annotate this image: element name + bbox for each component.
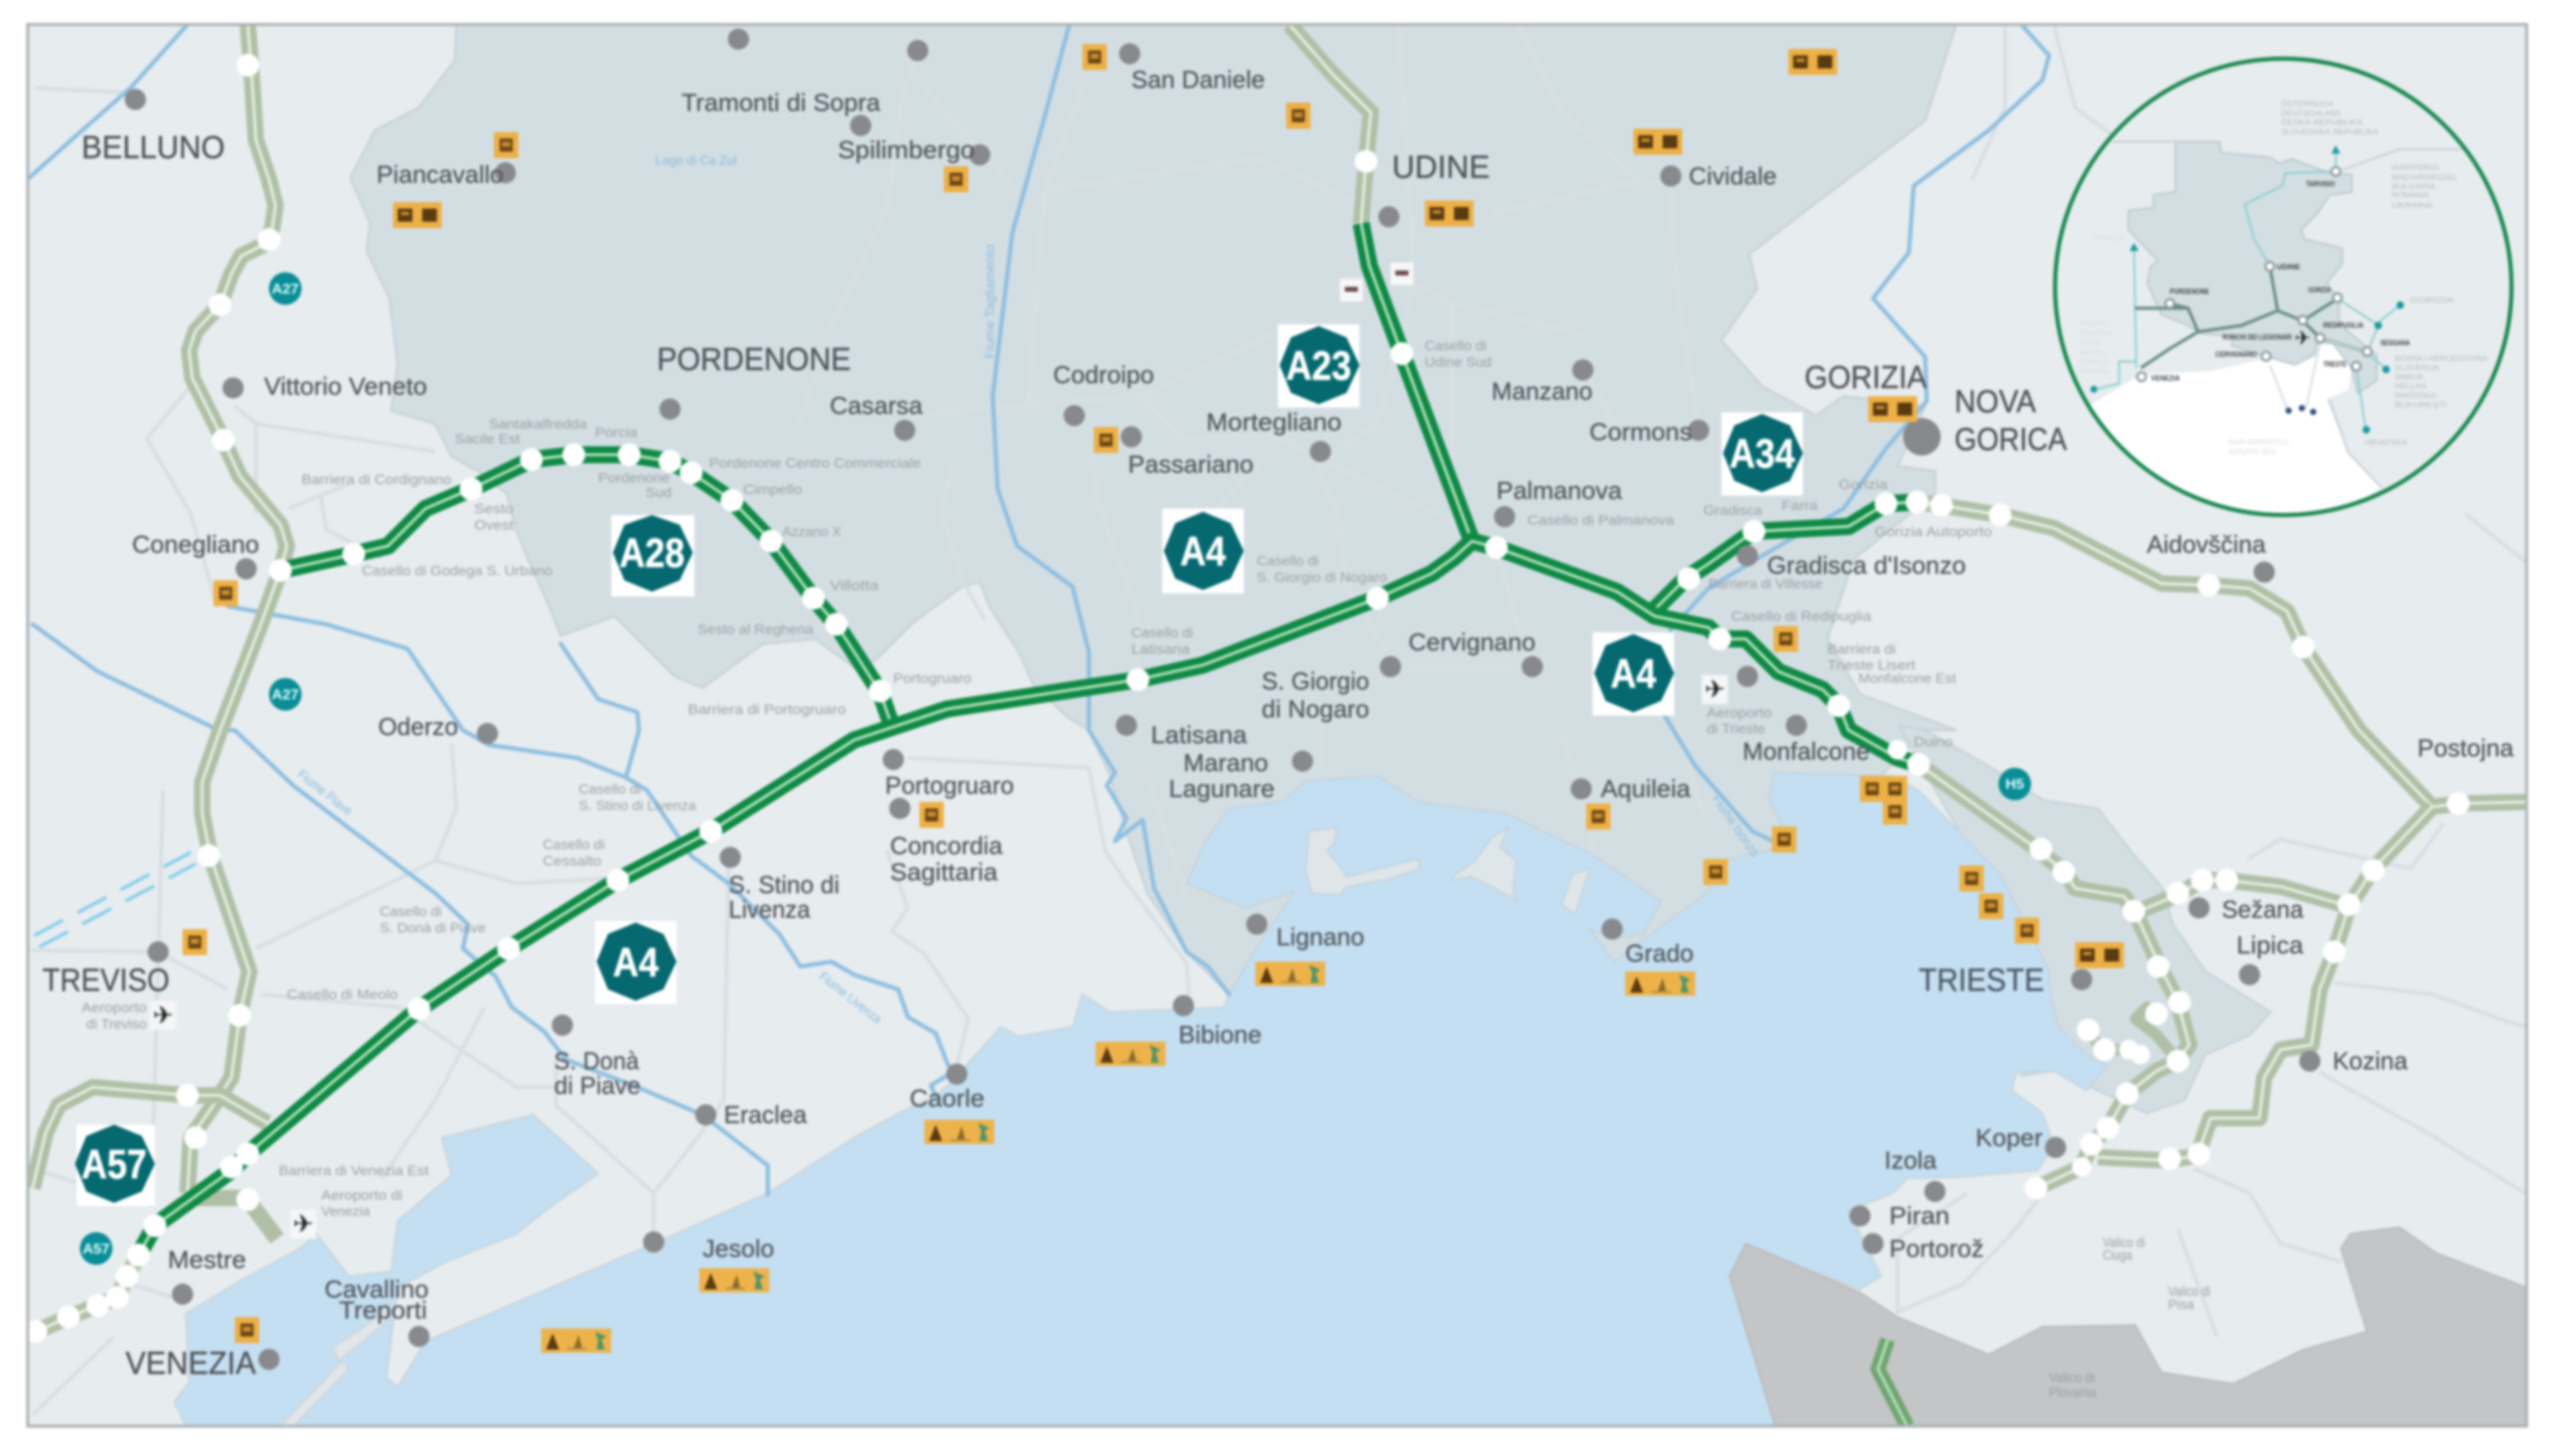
- river: tributary: [561, 644, 639, 778]
- small badges: A27 A57 H5: [80, 272, 2031, 1265]
- water labels: Fiume Piave: [295, 768, 355, 819]
- water labels: Lago di Ca Zul: [655, 154, 737, 168]
- city labels: Sagittaria: [890, 859, 998, 886]
- city labels: Lignano: [1276, 924, 1364, 951]
- city labels: VENEZIA: [126, 1346, 256, 1381]
- city labels: Mortegliano: [1207, 409, 1341, 436]
- toll gate and minor labels: Gorizia: [1839, 476, 1888, 492]
- city labels: Treporti: [339, 1298, 427, 1325]
- water labels: Fiume Tagliamento: [984, 245, 998, 359]
- city labels: PORDENONE: [657, 342, 851, 378]
- city labels: Cavallino: [324, 1276, 429, 1303]
- motorway shield: A34: [1722, 412, 1803, 495]
- river: Isonzo: [1654, 25, 2049, 851]
- city labels: BELLUNO: [81, 131, 225, 166]
- city labels: S. Giorgio: [1262, 668, 1369, 696]
- city labels: Piran: [1889, 1203, 1950, 1230]
- airport and service icons: [150, 263, 1728, 1238]
- city labels: Cividale: [1689, 163, 1777, 190]
- islands: Venice lido: [280, 1299, 391, 1426]
- motorway shield: A28: [611, 515, 694, 596]
- inset labels: MAR ADRIATICO: [2228, 439, 2288, 448]
- city labels: GORIZIA: [1804, 360, 1927, 395]
- city labels: Izola: [1884, 1147, 1937, 1174]
- city labels: Sežana: [2222, 896, 2304, 923]
- inset labels: BOLOGNA: [2080, 328, 2113, 338]
- inset labels: BOSNA I HERCEGOVINA: [2395, 355, 2488, 364]
- inset arrows: [2090, 145, 2404, 434]
- toll gate and minor labels: Pordenone Centro Commerciale: [709, 456, 921, 471]
- city labels: Kozina: [2333, 1048, 2408, 1075]
- inset labels: ČESKÁ REPUBLIKA: [2281, 118, 2364, 127]
- inset labels: SRBIJA: [2395, 373, 2424, 382]
- inset labels: NIEDERÖSTERREICH: [2392, 163, 2439, 172]
- inset labels: PORDENONE: [2170, 287, 2209, 296]
- Croatian motorway segment: [1878, 1339, 1907, 1426]
- toll gate and minor labels: Ovest: [475, 517, 514, 533]
- city labels: Oderzo: [378, 714, 458, 741]
- toll gate and minor labels: Valico di: [2168, 1284, 2210, 1299]
- motorway shield: A4 east: A4: [1611, 651, 1657, 697]
- toll gate and minor labels: Venezia: [321, 1204, 370, 1219]
- inset labels: HRVATSKA: [2365, 439, 2407, 448]
- city labels: Piancavallo: [376, 161, 503, 188]
- small badges: A27 A57 H5: A57: [83, 1240, 110, 1256]
- toll gate and minor labels: Duino: [1914, 734, 1953, 750]
- toll gate and minor labels: Casello di: [1131, 625, 1193, 641]
- toll gate and minor labels: Barriera di Cordignano: [301, 471, 452, 487]
- inset labels: VENEZIA: [2151, 374, 2180, 383]
- toll gate and minor labels: Monfalcone Est: [1859, 671, 1956, 687]
- toll gate and minor labels: Casello di: [1257, 553, 1319, 569]
- inset white sea: [2085, 342, 2381, 525]
- airport and service icons: ✈: [1704, 676, 1725, 703]
- airport and service icons: ✈: [293, 1210, 314, 1238]
- city labels: Jesolo: [702, 1235, 775, 1262]
- city labels: Postojna: [2417, 735, 2514, 762]
- city labels: TRIESTE: [1919, 963, 2044, 999]
- toll gate and minor labels: Farra: [1781, 498, 1818, 513]
- motorway shield: A4 south: [595, 921, 677, 1004]
- inset labels: HELLAS: [2395, 382, 2426, 391]
- region: Friuli Venezia Giulia: [351, 25, 1956, 1043]
- river: Tagliamento: [993, 25, 1229, 994]
- toll gate and minor labels: [81, 338, 2210, 1400]
- toll gate and minor labels: Santakalfredda: [489, 416, 587, 432]
- tourism icons, orange: [182, 44, 2124, 1353]
- motorway shield: A4 north: [1162, 508, 1244, 593]
- city markers, grey dots: [125, 29, 2320, 1370]
- toll gate and minor labels: Valico di: [2049, 1370, 2094, 1385]
- toll gate and minor labels: Ciuga: [2103, 1247, 2132, 1263]
- city labels: GORICA: [1955, 422, 2067, 457]
- toll gate and minor labels: Latisana: [1131, 641, 1191, 657]
- inset labels: [2080, 100, 2488, 457]
- inset labels: SLOVENSKÁ REPUBLIKA: [2281, 127, 2379, 136]
- city labels: Casarsa: [830, 393, 923, 420]
- airport and service icons: ✈: [153, 1002, 173, 1029]
- city labels: Codroipo: [1053, 361, 1154, 388]
- motorway shield: A4 south: A4: [613, 939, 659, 985]
- region: Trieste Karst band: [1899, 725, 2271, 1114]
- inset: circular locator map: [2055, 58, 2524, 525]
- city labels: NOVA: [1955, 384, 2036, 420]
- inset labels: ADRIATIC SEA: [2228, 448, 2276, 457]
- toll gate and minor labels: Aeroporto: [81, 1000, 147, 1016]
- toll gate and minor labels: Gorizia Autoporto: [1874, 524, 1992, 540]
- river: upper left: [30, 25, 187, 177]
- motorway shield: A34: A34: [1730, 431, 1795, 477]
- motorway shield: A23: [1278, 324, 1359, 407]
- inset labels: ROMANIA: [2392, 191, 2430, 200]
- city labels: Portorož: [1889, 1235, 1984, 1262]
- toll gate and minor labels: Trieste Lisert: [1827, 658, 1915, 673]
- inset labels: BUKUREŞTI: [2395, 401, 2447, 410]
- toll gate and minor labels: Sud: [646, 485, 672, 500]
- city labels: Marano: [1184, 750, 1268, 777]
- inset labels: DEUTSCHLAND: [2281, 109, 2341, 118]
- city labels: San Daniele: [1131, 67, 1265, 94]
- city labels: Tramonti di Sopra: [682, 90, 880, 117]
- city labels: Cervignano: [1409, 629, 1536, 656]
- toll gate and minor labels: di Treviso: [86, 1016, 147, 1031]
- toll gate and minor labels: Barriera di Portogruaro: [688, 701, 846, 717]
- city labels: di Nogaro: [1262, 696, 1369, 723]
- inset airport icon: ✈: [2295, 328, 2311, 349]
- inset region outline: [2128, 141, 2377, 393]
- city labels: Vittorio Veneto: [264, 373, 427, 400]
- toll gate and minor labels: Porcia: [595, 425, 638, 440]
- inset labels: RONCHI DEI LEGIONARI: [2223, 333, 2292, 342]
- inset city rings: [2137, 167, 2372, 381]
- motorway shield: A28: A28: [619, 530, 685, 576]
- toll gate and minor labels: S. Giorgio di Nogaro: [1257, 570, 1387, 586]
- city labels: di Piave: [554, 1072, 641, 1100]
- toll gate and minor labels: Casello di: [379, 903, 442, 919]
- toll gate and minor labels: Aeroporto: [1707, 705, 1772, 720]
- inset ferry markers: [2286, 405, 2316, 415]
- river: Livenza: [228, 606, 952, 1095]
- toll gate and minor labels: Pordenone: [598, 470, 670, 485]
- city labels: Portogruaro: [885, 773, 1014, 800]
- inset labels: TARVISIO: [2306, 180, 2335, 189]
- water labels: [295, 154, 1762, 1027]
- city labels: Mestre: [168, 1247, 246, 1274]
- city labels: UDINE: [1392, 149, 1490, 185]
- toll gate and minor labels: Sesto al Reghena: [697, 622, 814, 637]
- inset labels: ÖSTERREICH: [2281, 100, 2333, 109]
- toll gate and minor labels: Udine Sud: [1425, 355, 1492, 370]
- toll gate and minor labels: Sesto: [475, 501, 513, 517]
- city labels: Aidovščina: [2147, 531, 2266, 558]
- inset connection lines, teal: [2094, 149, 2400, 429]
- toll gate and minor labels: Casello di Godega S. Urbano: [362, 563, 553, 579]
- toll gate and minor labels: Portogruaro: [894, 671, 972, 687]
- toll gate and minor labels: S. Donà di Piave: [379, 920, 485, 935]
- inset labels: UDINE: [2277, 263, 2301, 272]
- toll gate and minor labels: Plovania: [2049, 1385, 2097, 1400]
- inset green ring: [2055, 58, 2512, 515]
- motorway shield: A57: [75, 1124, 155, 1206]
- city labels: S. Donà: [554, 1048, 639, 1075]
- city labels: S. Stino di: [729, 872, 839, 899]
- toll gate and minor labels: di Trieste: [1707, 721, 1765, 737]
- toll gate and minor labels: Casello di: [1425, 338, 1487, 354]
- toll gate and minor labels: S. Stino di Livenza: [579, 797, 696, 813]
- inset labels: UKRAINA: [2392, 201, 2433, 210]
- motorway shield: A57: A57: [81, 1141, 147, 1187]
- inset labels: SLOVENIJA: [2395, 364, 2439, 373]
- inset labels: ESPAÑA: [2080, 368, 2110, 377]
- water labels: Fiume Isonzo: [1709, 792, 1762, 860]
- inset labels: REDIPUGLIA: [2324, 321, 2364, 330]
- city labels: Aquileia: [1601, 776, 1691, 803]
- inset labels: ROMA: [2080, 338, 2100, 347]
- toll gate and minor labels: Aeroporto di: [321, 1187, 402, 1203]
- toll gate and minor labels: Pisa: [2168, 1297, 2195, 1312]
- water labels: Fiume Livenza: [816, 970, 884, 1027]
- managed motorways, green: A4 A23 A28 A34: [139, 223, 1919, 1255]
- inset motorways: [2135, 266, 2338, 368]
- motorway shield: A4 north: A4: [1180, 529, 1226, 575]
- city labels: Grado: [1625, 940, 1694, 967]
- toll gate and minor labels: Casello di Palmanova: [1528, 512, 1675, 528]
- inset labels: TRIESTE: [2324, 360, 2347, 369]
- city labels: Conegliano: [132, 531, 260, 558]
- city labels: Palmanova: [1496, 477, 1622, 504]
- inset labels: GORIZIA: [2308, 286, 2331, 295]
- city labels: Koper: [1975, 1124, 2043, 1151]
- toll gate and minor labels: Barriera di Venezia Est: [278, 1163, 429, 1178]
- city labels: Spilimbergo: [838, 137, 975, 164]
- toll gate and minor labels: Casello di Redipuglia: [1731, 609, 1872, 624]
- toll gate and minor labels: Cessalto: [543, 853, 601, 869]
- city labels: Concordia: [890, 833, 1003, 860]
- islands: Grado lagoon: [1306, 828, 1589, 914]
- Croatia, grey territory: [1730, 1228, 2526, 1426]
- city labels: Passariano: [1128, 452, 1253, 479]
- toll gate and minor labels: Casello di: [579, 782, 641, 797]
- toll gate and minor labels: Villotta: [830, 577, 879, 593]
- city labels: Eraclea: [724, 1102, 807, 1129]
- toll gate and minor labels: Casello di: [543, 837, 605, 852]
- toll gate and minor labels: Barriera di: [1827, 641, 1896, 657]
- city labels: Lipica: [2236, 932, 2304, 959]
- rivers: [30, 25, 2049, 1195]
- small badges: A27 A57 H5: H5: [2006, 776, 2025, 792]
- city labels: TREVISO: [43, 963, 169, 999]
- toll gate and minor labels: Azzano X: [783, 524, 841, 540]
- toll gate and minor labels: Valico di: [2103, 1234, 2145, 1250]
- city labels: Caorle: [909, 1086, 985, 1113]
- motorway shield: A4 east: [1593, 632, 1674, 715]
- ferry route, dashed light-blue double line: [34, 852, 195, 947]
- toll gate and minor labels: Barriera di Villesse: [1708, 576, 1823, 592]
- motorway shield: A23: A23: [1286, 342, 1351, 388]
- inset labels: ITALIA: [2095, 234, 2126, 243]
- city labels: Latisana: [1151, 722, 1248, 749]
- inset labels: MAKEDONIJA: [2395, 392, 2437, 401]
- city labels: Cormons: [1589, 419, 1692, 446]
- city labels: Gradisca d'Isonzo: [1767, 553, 1966, 580]
- small badges: A27 A57 H5: A27: [272, 686, 299, 702]
- city labels: Livenza: [729, 896, 811, 923]
- toll gate and minor labels: Casello di Meolo: [287, 987, 398, 1003]
- inset labels: NAPOLI: [2080, 349, 2105, 358]
- inset labels: MILANO: [2080, 319, 2108, 328]
- inset labels: BULGARIA: [2392, 182, 2436, 191]
- inset labels: SESSANA: [2380, 338, 2410, 347]
- inset labels: FRANCE: [2080, 358, 2109, 367]
- city labels: Monfalcone: [1743, 738, 1869, 765]
- inset labels: GORIZIA: [2410, 296, 2454, 305]
- toll gate and minor labels: Sacile Est: [455, 431, 520, 447]
- river: Piave: [33, 624, 768, 1195]
- inset labels: CERVIGNANO: [2215, 351, 2257, 360]
- city labels: Bibione: [1179, 1022, 1262, 1049]
- small badges: A27 A57 H5: A27: [272, 280, 299, 296]
- inset labels: MAGYARORSZÁG: [2392, 173, 2456, 182]
- city labels: Manzano: [1492, 378, 1593, 405]
- sea: [174, 773, 2108, 1426]
- city labels: Lagunare: [1169, 776, 1275, 803]
- toll gate and minor labels: Cimpello: [743, 481, 802, 497]
- toll gate and minor labels: Gradisca: [1703, 503, 1763, 518]
